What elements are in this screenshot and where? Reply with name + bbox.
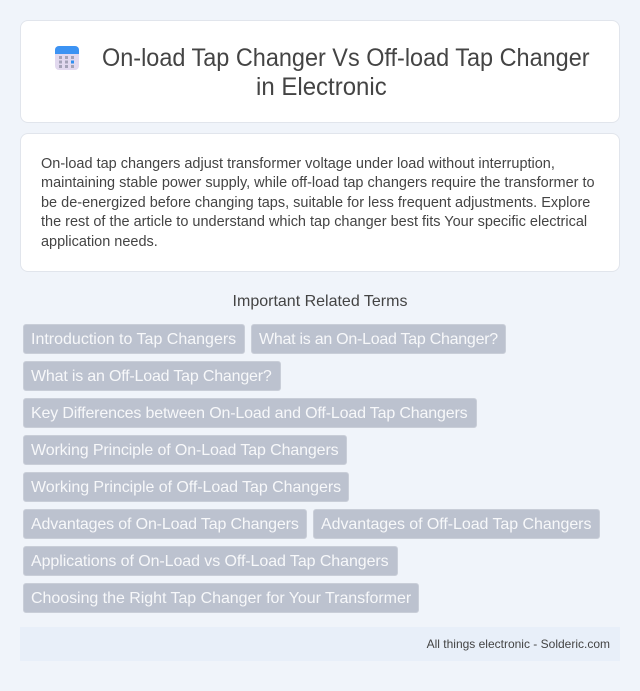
tag: Applications of On-Load vs Off-Load Tap Changers [31,553,389,570]
intro paragraph: On-load tap changers adjust transformer voltage under load without interruption, [41,155,555,172]
intro paragraph [41,155,595,250]
tag [23,435,347,465]
tag [23,361,281,391]
tag: What is an Off-Load Tap Changer? [31,368,272,385]
footer credit: All things electronic - Solderic.com [427,637,610,651]
intro paragraph: be de-energized before changing taps, suitable for less frequent adjustments. Explore [41,194,590,211]
header panel [20,20,620,123]
related terms heading: Important Related Terms [233,293,407,310]
tag [23,324,245,354]
tag: Introduction to Tap Changers [31,331,236,348]
intro paragraph: the rest of the article to understand which tap changer best fits Your specific electrical [41,213,587,230]
tag [313,509,600,539]
intro paragraph: maintaining stable power supply, while off-load tap changers require the transformer to [41,174,595,191]
intro text panel [20,133,620,272]
tag [23,398,477,428]
tag: Working Principle of On-Load Tap Changers [31,442,339,459]
tag: Choosing the Right Tap Changer for Your Transformer [31,590,411,607]
icon: calendar [55,46,79,70]
title [102,44,590,101]
tag: Advantages of On-Load Tap Changers [31,516,299,533]
intro paragraph: application needs. [41,233,158,250]
tag: What is an On-Load Tap Changer? [259,331,498,348]
tag: Advantages of Off-Load Tap Changers [321,516,591,533]
tag [23,509,307,539]
tag [23,583,419,613]
title: in Electronic [256,73,387,101]
tag [251,324,506,354]
tag: Key Differences between On-Load and Off-Load Tap Changers [31,405,468,422]
related terms tags [23,324,600,613]
tag: Working Principle of Off-Load Tap Changers [31,479,341,496]
footer bar [20,627,620,661]
title: On-load Tap Changer Vs Off-load Tap Changer [102,44,589,72]
tag [23,472,349,502]
tag [23,546,398,576]
